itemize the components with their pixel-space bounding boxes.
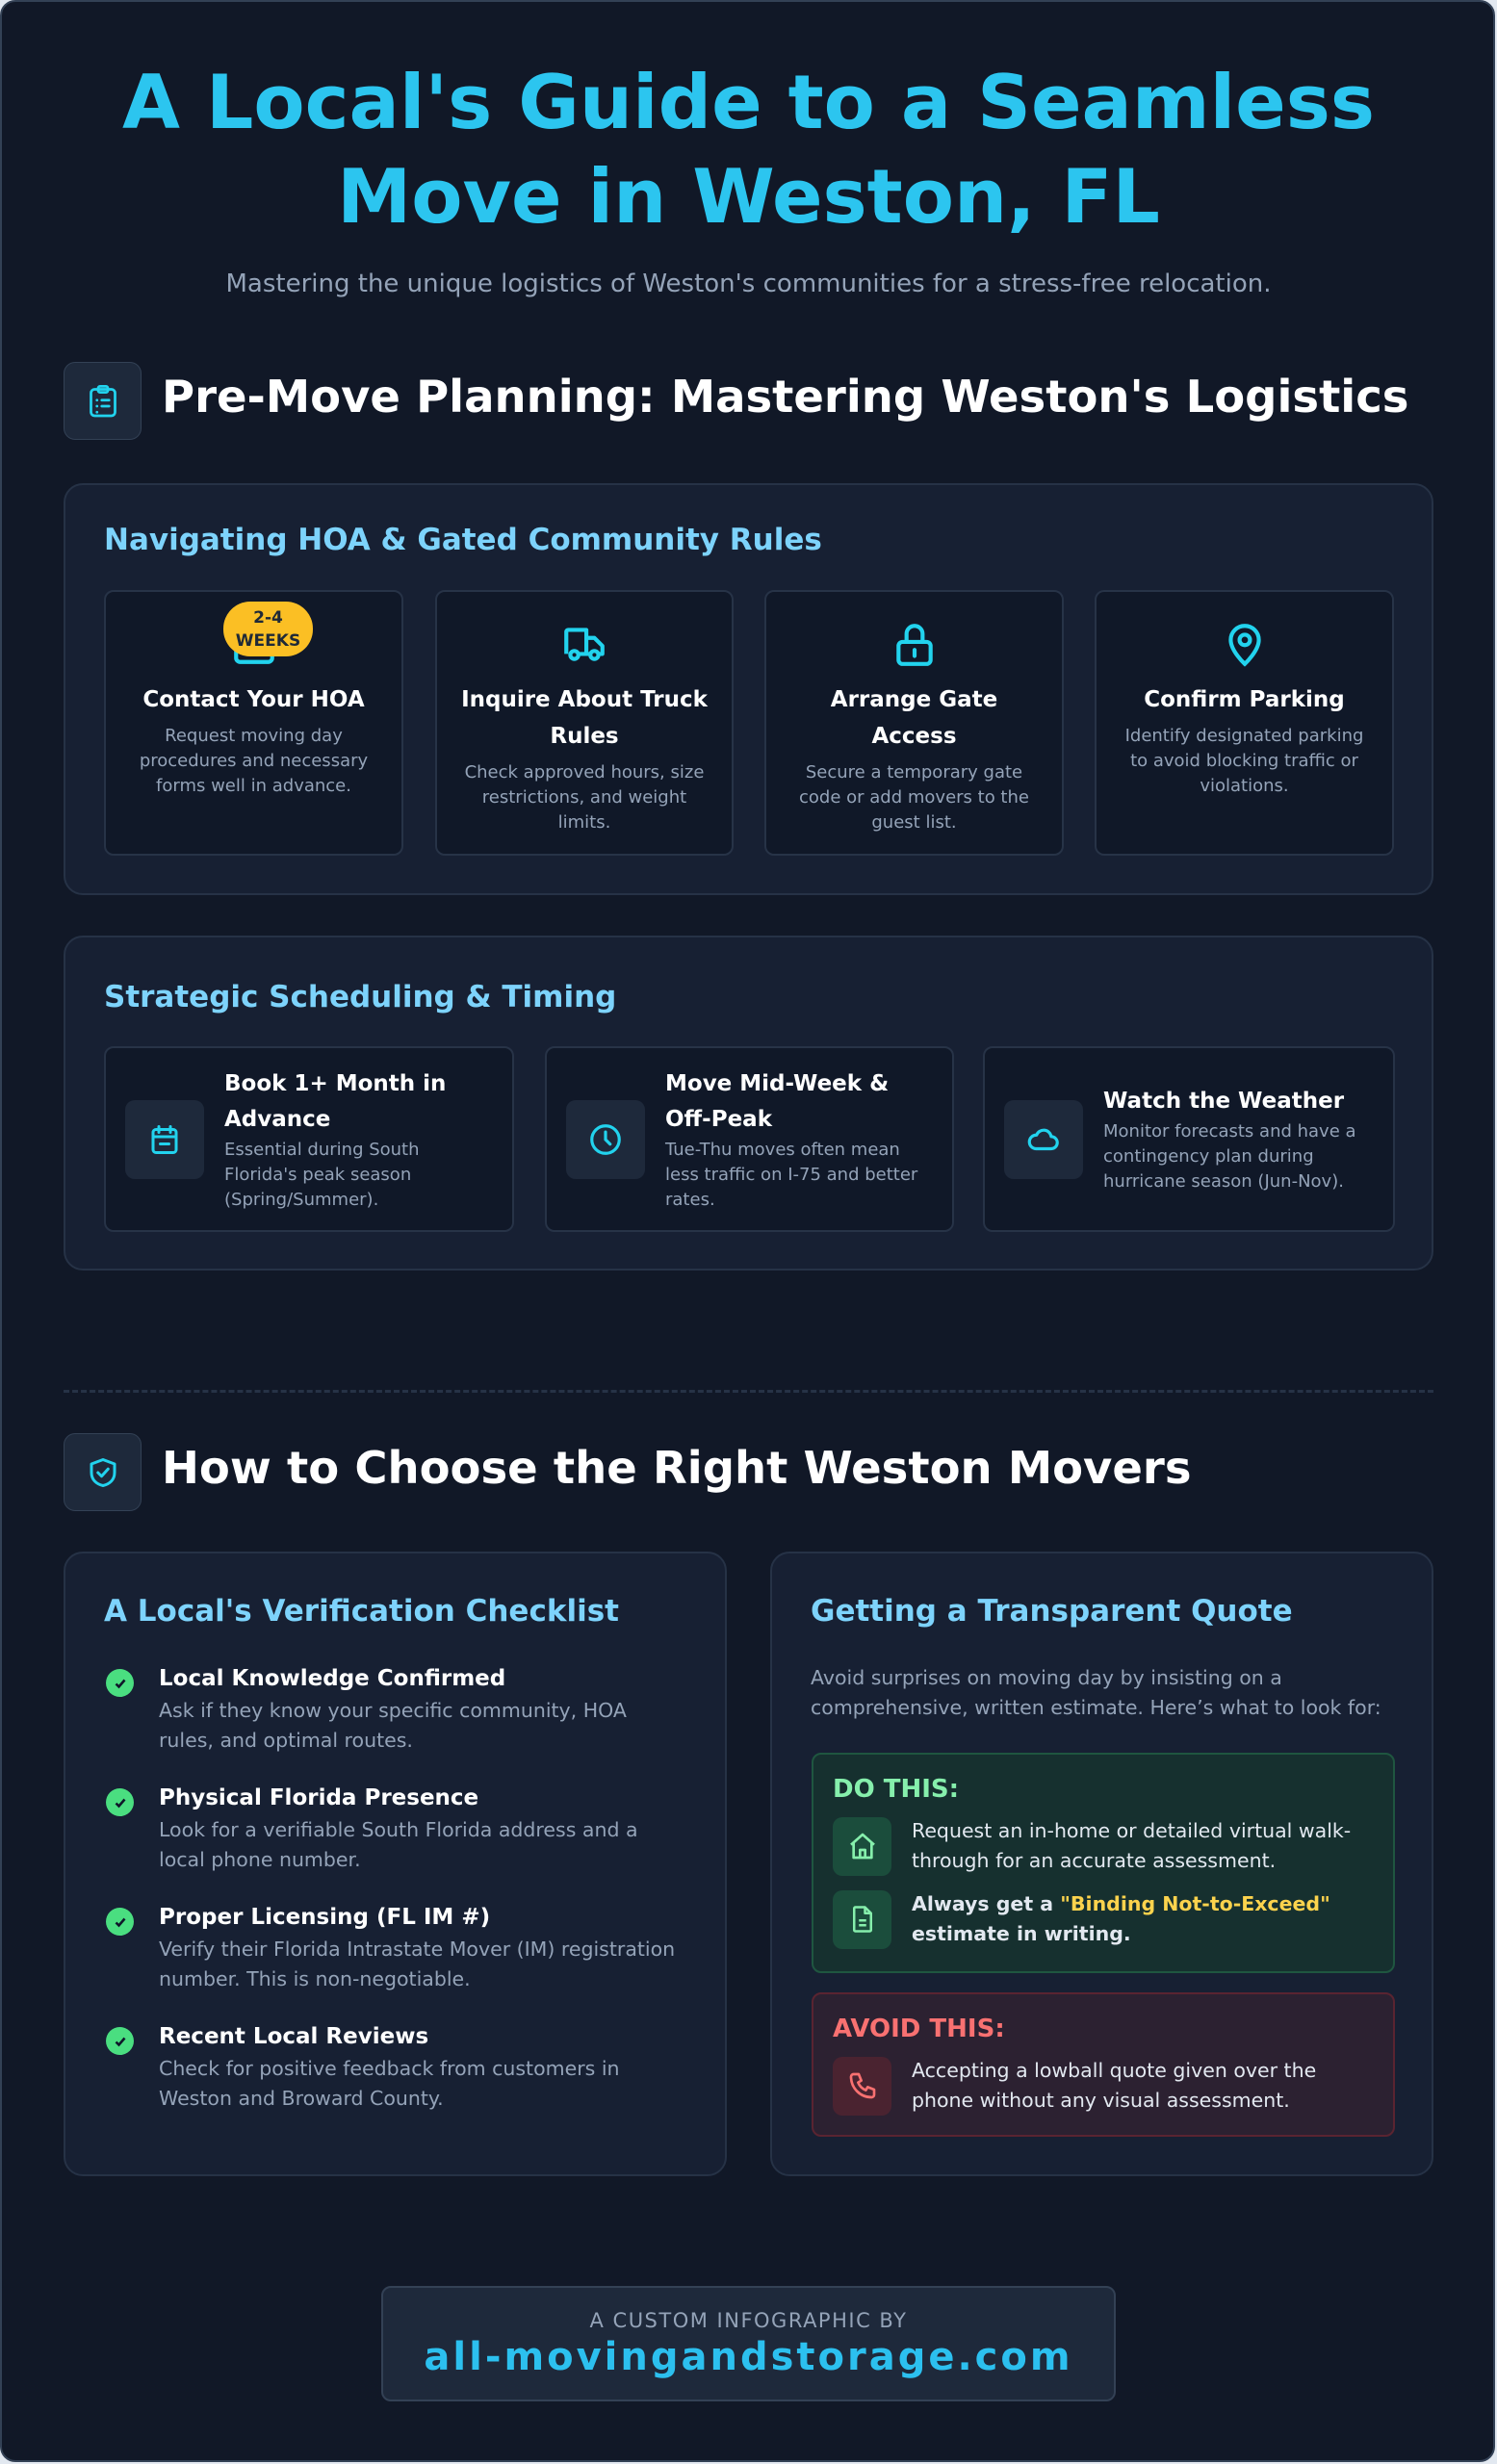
footer credit: all-movingandstorage.com	[424, 2335, 1073, 2379]
do this box: DO THIS:	[833, 1775, 959, 1804]
item: local knowledge: Local Knowledge Confirmed	[159, 1666, 505, 1691]
panel: verification checklist	[64, 1552, 727, 2176]
badge: 2-4 weeks: WEEKS	[236, 631, 300, 651]
card: truck rules	[435, 590, 734, 856]
subtitle: Mastering the unique logistics of Weston's communities for a stress-free relocation.	[225, 270, 1271, 298]
checklist	[106, 1666, 675, 2110]
item: reviews: Weston and Broward County.	[159, 2087, 444, 2110]
item: lowball quote: Accepting a lowball quote given over the phone without any visual assessment.	[912, 2059, 1316, 2112]
badge: 2-4 weeks	[223, 602, 313, 656]
card: gate access: Access	[871, 724, 957, 749]
card: contact HOA: Request moving day procedures and necessary forms well in advance.	[140, 726, 368, 796]
item: in-home assessment: Request an in-home or detailed virtual walk-through for an accurate assessment.	[912, 1819, 1351, 1872]
card: gate access	[764, 590, 1064, 856]
avoid this box: AVOID THIS:	[833, 2015, 1005, 2043]
card: mid-week: Move Mid-Week & Off-Peak	[665, 1070, 889, 1132]
card: gate access: Arrange Gate	[831, 687, 997, 712]
item: licensing: number. This is non-negotiable.	[159, 1967, 471, 1990]
item: reviews	[106, 2024, 620, 2110]
title: A Local's Guide to a Seamless	[122, 60, 1375, 146]
avoid this box	[812, 1992, 1395, 2137]
panel heading: Strategic Scheduling & Timing	[104, 980, 616, 1014]
icon: shield	[64, 1433, 142, 1511]
badge: 2-4 weeks: 2-4	[253, 608, 283, 628]
item: licensing	[106, 1905, 675, 1990]
card: book early: Essential during South Florida's peak season (Spring/Summer).	[224, 1140, 420, 1209]
card: weather	[983, 1046, 1395, 1232]
card: book early: Book 1+ Month in Advance	[224, 1070, 446, 1132]
section heading: choose movers: How to Choose the Right Weston Movers	[162, 1442, 1192, 1494]
title	[122, 60, 1375, 241]
item: reviews: Check for positive feedback from customers in	[159, 2057, 620, 2080]
footer credit: A CUSTOM INFOGRAPHIC BY	[589, 2309, 908, 2332]
panel heading: Getting a Transparent Quote	[811, 1594, 1293, 1629]
card: gate access: Secure a temporary gate code or add movers to the guest list.	[799, 762, 1029, 833]
panel: scheduling	[64, 936, 1433, 1270]
item: local knowledge: rules, and optimal routes.	[159, 1729, 413, 1752]
card: parking: Identify designated parking to avoid blocking traffic or violations.	[1125, 726, 1363, 796]
panel: transparent quote	[770, 1552, 1433, 2176]
card: weather: Watch the Weather	[1103, 1089, 1344, 1114]
card: contact HOA	[104, 590, 403, 856]
card: truck rules: Check approved hours, size restrictions, and weight limits.	[465, 762, 704, 833]
card: truck rules: Inquire About Truck Rules	[461, 687, 708, 749]
panel heading: A Local's Verification Checklist	[104, 1594, 619, 1629]
card: weather: Monitor forecasts and have a contingency plan during hurricane season (Jun-Nov).	[1103, 1121, 1356, 1192]
item: florida presence: local phone number.	[159, 1848, 361, 1871]
card: parking	[1095, 590, 1394, 856]
item: florida presence: Look for a verifiable South Florida address and a	[159, 1818, 638, 1841]
panel heading: Navigating HOA & Gated Community Rules	[104, 523, 822, 557]
do this box	[812, 1753, 1395, 1973]
title: Move in Weston, FL	[337, 154, 1160, 241]
panel: HOA rules	[64, 483, 1433, 895]
intro text: Avoid surprises on moving day by insisting on a comprehensive, written estimate. Here’s what to look for:	[811, 1666, 1381, 1719]
item: florida presence: Physical Florida Presence	[159, 1785, 478, 1810]
card: contact HOA: Contact Your HOA	[142, 687, 365, 712]
item: local knowledge: Ask if they know your specific community, HOA	[159, 1699, 627, 1722]
item: reviews: Recent Local Reviews	[159, 2024, 428, 2049]
item: florida presence	[106, 1785, 638, 1871]
item: local knowledge	[106, 1666, 627, 1752]
footer credit	[381, 2286, 1116, 2401]
item: licensing: Verify their Florida Intrastate Mover (IM) registration	[159, 1938, 675, 1961]
item: binding estimate: Always get a "Binding Not-to-Exceed" estimate in writing.	[912, 1892, 1330, 1945]
card: book early	[104, 1046, 514, 1232]
icon: clipboard	[64, 362, 142, 440]
card: mid-week: Tue-Thu moves often mean less traffic on I-75 and better rates.	[665, 1140, 917, 1209]
item: licensing: Proper Licensing (FL IM #)	[159, 1905, 490, 1930]
section heading: pre-move planning: Pre-Move Planning: Mastering Weston's Logistics	[162, 371, 1408, 423]
card: parking: Confirm Parking	[1144, 687, 1345, 712]
card: mid-week	[545, 1046, 954, 1232]
